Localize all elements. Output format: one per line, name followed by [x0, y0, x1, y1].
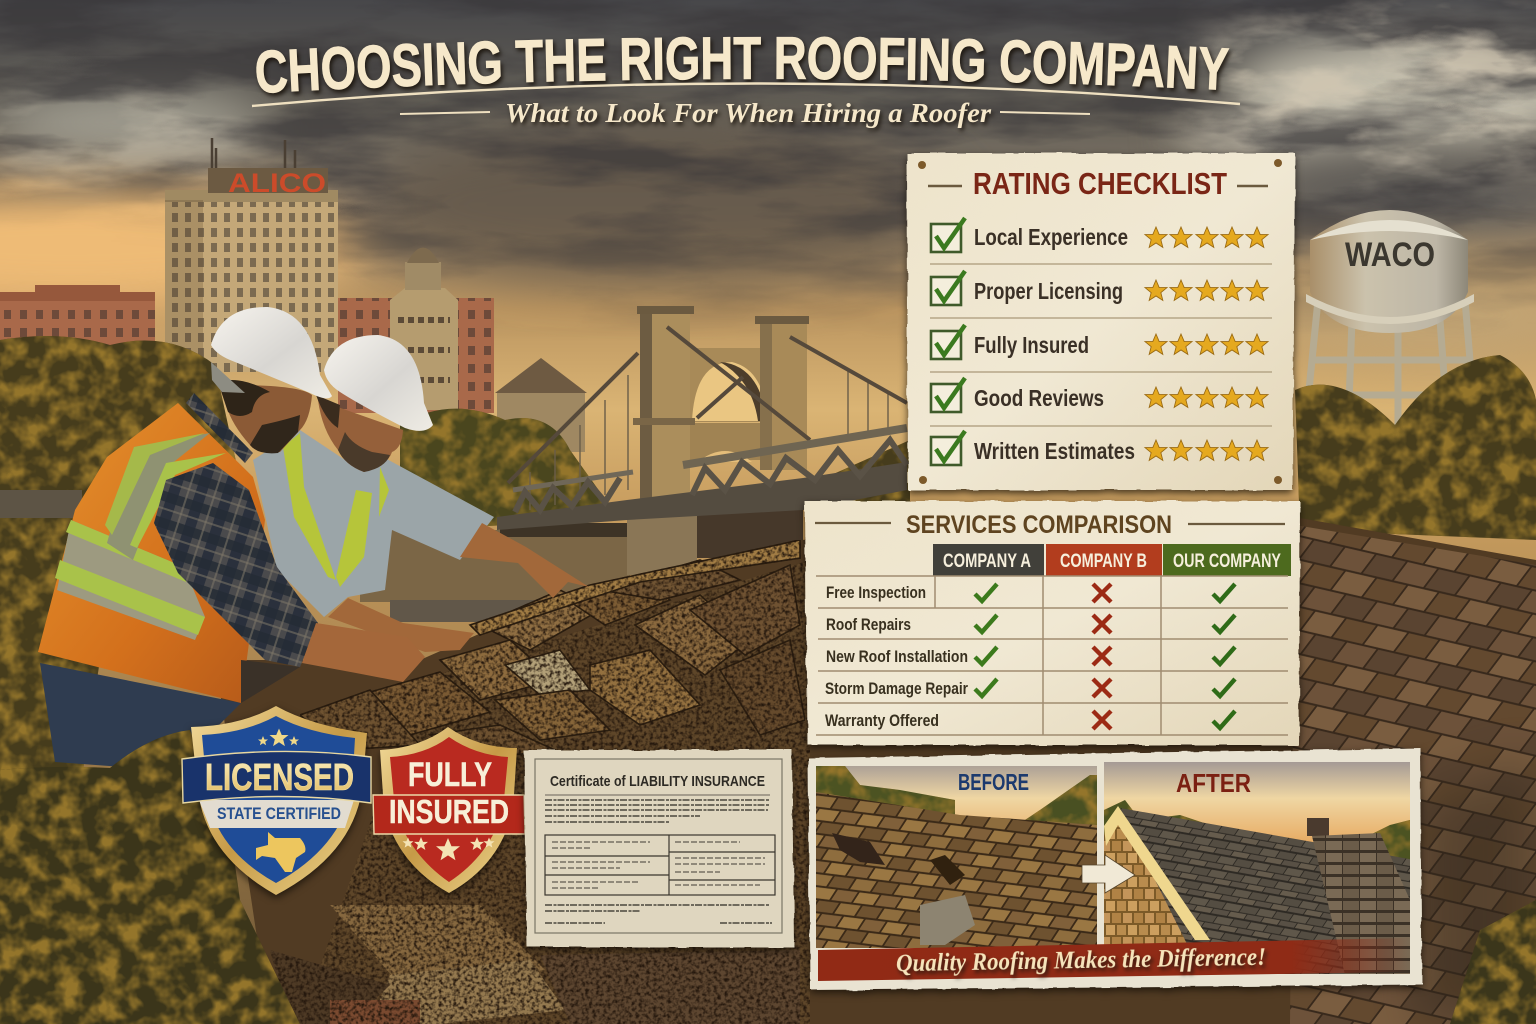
subtitle: What to Look For When Hiring a Roofer: [505, 98, 992, 128]
badge: fully insured: FULLY: [408, 756, 492, 794]
row: local experience: [931, 218, 1268, 252]
red banner with tagline: Quality Roofing Makes the Difference!: [896, 944, 1266, 977]
column headers: OUR COMPANY: [1173, 551, 1281, 572]
fine print: [545, 800, 772, 923]
certificate heading: Certificate of LIABILITY INSURANCE: [550, 773, 765, 790]
navy ribbon: [182, 751, 371, 803]
Texas map emblem: [256, 832, 305, 872]
white hard hat: [211, 307, 332, 398]
row: local experience: Local Experience: [974, 224, 1128, 250]
lime safety vest straps: [283, 433, 389, 587]
forearm and hand: [302, 623, 425, 682]
water tower: WACO: [1345, 236, 1435, 274]
red banner with tagline: [818, 938, 1410, 981]
stars: [402, 837, 494, 860]
plaid shirt sleeve and collar: [154, 393, 318, 667]
worker in lime vest: [253, 335, 589, 652]
worker in orange vest: [38, 307, 425, 772]
jeans: [40, 663, 241, 772]
badge: fully insured: INSURED: [389, 793, 509, 830]
head and beard: [316, 395, 403, 472]
row: proper licensing: Proper Licensing: [974, 278, 1123, 304]
row labels: Warranty Offered: [825, 712, 939, 730]
certificate of liability insurance: [524, 750, 794, 947]
row: good reviews: Good Reviews: [974, 385, 1104, 411]
foreground roof slabs: [270, 905, 800, 1024]
ALICO tower: ALICO: [228, 168, 326, 198]
courthouse dome: [495, 358, 587, 452]
row: written estimates: [931, 431, 1268, 465]
check and cross marks: [975, 584, 1235, 729]
skyline: ALICO building and downtown Waco: [0, 138, 587, 452]
badge: fully insured: [373, 727, 525, 893]
dark shirt hem shadow: [241, 660, 300, 703]
before label: BEFORE: [958, 769, 1029, 795]
panel: services comparison: [805, 501, 1300, 745]
panel heading: SERVICES COMPARISON: [906, 511, 1172, 539]
arrow: [1082, 855, 1135, 893]
main roof surface: [215, 518, 1536, 1024]
column headers: COMPANY A: [943, 551, 1031, 572]
white hard hat: [324, 335, 433, 431]
badge: licensed: LICENSED: [205, 757, 354, 799]
certificate table: [545, 835, 775, 895]
row: fully insured: Fully Insured: [974, 332, 1089, 358]
main suspension cables: [508, 327, 907, 483]
hanger cables: [530, 365, 888, 510]
domed clock building: [338, 248, 494, 413]
before and after photo card: [808, 748, 1422, 990]
blue-grey work shirt: [253, 430, 494, 617]
column headers: [933, 544, 1291, 576]
steel truss deck: [497, 428, 907, 530]
after label: AFTER: [1176, 768, 1251, 798]
after photo: [1104, 760, 1415, 975]
main title: [256, 79, 1228, 93]
row labels: New Roof Installation: [826, 648, 968, 666]
badge: licensed: STATE CERTIFIED: [217, 804, 341, 823]
title block: [252, 36, 1240, 133]
row: fully insured: [931, 325, 1268, 359]
riverside building and low roof: [0, 490, 630, 622]
row labels: Free Inspection: [826, 584, 926, 602]
column headers: COMPANY B: [1060, 551, 1147, 572]
ALICO tower: [165, 138, 338, 372]
before photo: [816, 766, 1100, 948]
row labels: [825, 584, 968, 730]
suspension bridge: [497, 306, 907, 575]
tree line: [0, 336, 1536, 800]
orange safety vest: [38, 403, 265, 703]
red ribbon: [373, 795, 525, 834]
foreground foliage: [0, 730, 1536, 1024]
red brick building: [0, 285, 155, 363]
damaged shingles: [300, 540, 805, 760]
forearms and pointing hand: [328, 523, 589, 652]
stone towers and arches: [500, 306, 809, 575]
panel: rating checklist: [907, 153, 1295, 490]
title block: CHOOSING THE RIGHT ROOFING COMPANY: [256, 36, 1233, 98]
row: good reviews: [931, 378, 1268, 412]
shield: [380, 727, 517, 893]
head, hair and beard: [211, 362, 312, 453]
stars: [258, 728, 299, 746]
badge: licensed: [182, 706, 371, 895]
row: proper licensing: [931, 271, 1268, 305]
row: written estimates: Written Estimates: [974, 438, 1135, 464]
panel heading: RATING CHECKLIST: [973, 166, 1227, 201]
row labels: Roof Repairs: [826, 616, 911, 634]
shield: [191, 706, 367, 895]
title underline swoosh: [252, 83, 1240, 106]
row labels: Storm Damage Repair: [825, 680, 968, 698]
water tower: [1306, 210, 1475, 435]
